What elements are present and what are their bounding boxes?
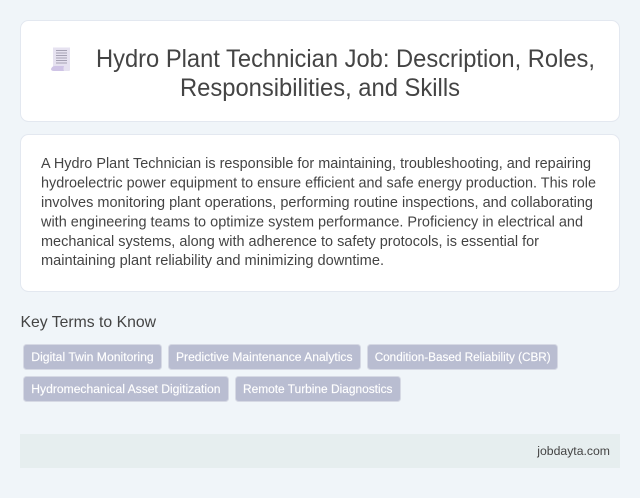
- text block: description: involves monitoring plant operations, performing routine inspections, and collaborating: [41, 195, 593, 211]
- title: [96, 45, 595, 102]
- icon: document scroll: [51, 48, 70, 71]
- text block: description: mechanical systems, along with adherence to safety protocols, is essential for: [41, 234, 539, 250]
- tag: digital twin monitoring: Digital Twin Monitoring: [31, 350, 154, 364]
- title: Responsibilities, and Skills: [180, 74, 460, 102]
- tag: condition-based reliability: Condition-Based Reliability (CBR): [375, 350, 551, 364]
- footer: [20, 434, 620, 468]
- tag: predictive maintenance analytics: Predictive Maintenance Analytics: [176, 350, 352, 364]
- panel: description: [20, 134, 620, 292]
- footer: jobdayta.com: [536, 444, 610, 458]
- tag: hydromechanical asset digitization: Hydromechanical Asset Digitization: [31, 382, 221, 396]
- heading: key terms: Key Terms to Know: [20, 314, 156, 331]
- text block: description: hydroelectric power equipment to ensure efficient and safe energy production. This role: [41, 176, 596, 192]
- tag: hydromechanical asset digitization: [24, 376, 228, 402]
- text block: description: [40, 156, 596, 269]
- title: Hydro Plant Technician Job: Description, Roles,: [96, 45, 595, 73]
- text block: description: maintaining plant reliability and minimizing downtime.: [41, 253, 384, 269]
- tag: remote turbine diagnostics: [236, 376, 400, 402]
- panel: header: [20, 20, 620, 122]
- text block: description: A Hydro Plant Technician is responsible for maintaining, troubleshooting, and repairing: [41, 156, 591, 172]
- tag: digital twin monitoring: [24, 344, 162, 370]
- tag: condition-based reliability: [368, 344, 558, 370]
- key term tags: [24, 344, 558, 402]
- tag: remote turbine diagnostics: Remote Turbine Diagnostics: [243, 382, 392, 396]
- text block: description: with engineering teams to optimize system performance. Proficiency in electrical and: [40, 214, 583, 230]
- tag: predictive maintenance analytics: [168, 344, 360, 370]
